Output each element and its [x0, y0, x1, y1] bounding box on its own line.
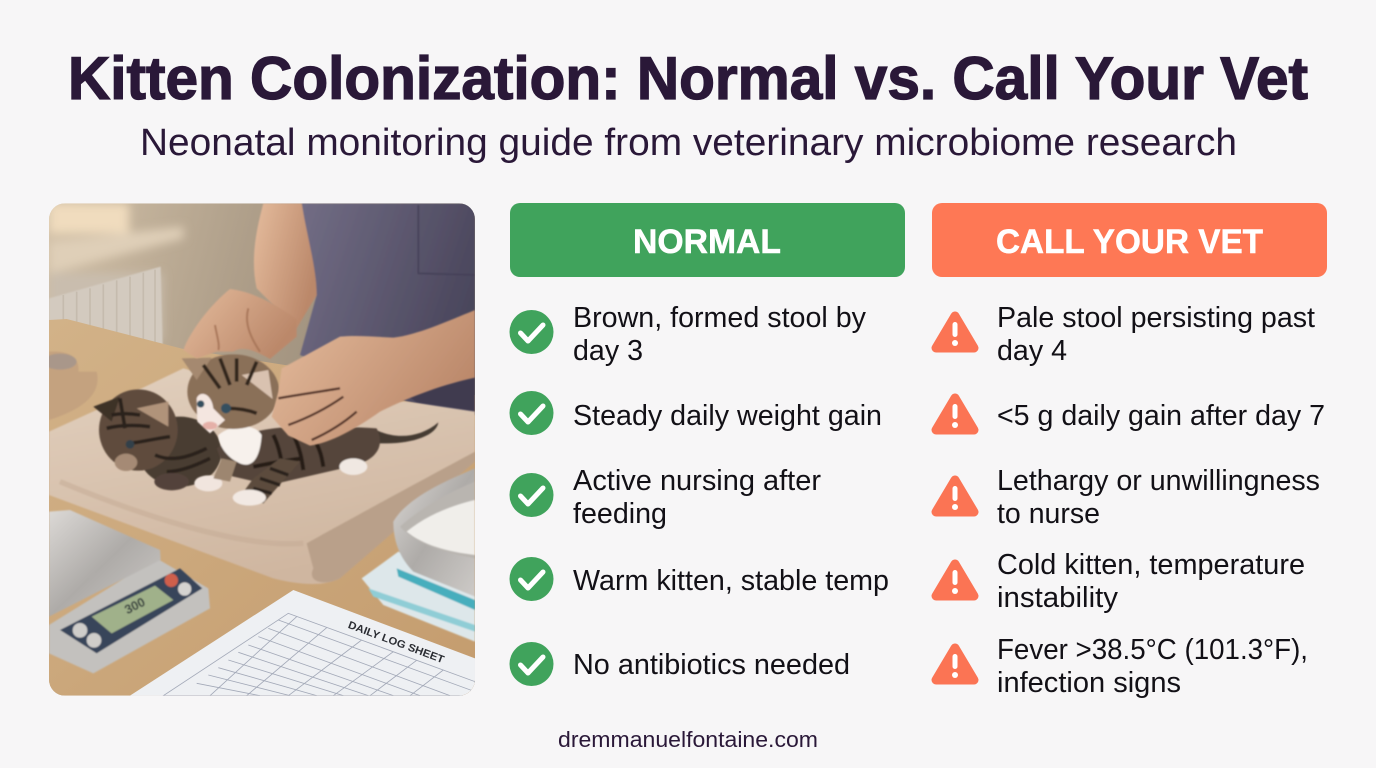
vet item: fever — [936, 634, 1308, 699]
normal item: stool: Brown, formed stool by — [573, 302, 866, 334]
normal item: antibiotics: No antibiotics needed — [573, 649, 850, 681]
normal item: weight: Steady daily weight gain — [573, 400, 882, 432]
call your vet header — [932, 203, 1327, 277]
photo: digital kitchen scale — [49, 510, 210, 673]
photo background: wall and window — [49, 203, 475, 696]
photo: daily log sheet: DAILY LOG SHEET — [346, 619, 446, 666]
vet item: cold kitten: Cold kitten, temperature — [997, 549, 1305, 581]
panel: normal — [510, 203, 905, 686]
normal item: stool: day 3 — [573, 335, 643, 367]
vet item: fever: infection signs — [997, 667, 1181, 699]
normal item: temperature — [510, 557, 889, 601]
normal item: temperature: Warm kitten, stable temp — [573, 565, 889, 597]
photo: person in scrubs — [254, 203, 475, 415]
footer website: dremmanuelfontaine.com — [558, 727, 818, 752]
vet item: cold kitten — [936, 549, 1305, 614]
normal header: NORMAL — [633, 223, 781, 261]
normal item: nursing: Active nursing after — [573, 465, 821, 497]
vet item: pale stool: Pale stool persisting past — [997, 302, 1315, 334]
vet item: pale stool — [936, 302, 1315, 367]
photo: daily log sheet — [130, 590, 475, 696]
normal item: stool — [510, 302, 866, 367]
subtitle: Neonatal monitoring guide from veterinary microbiome research — [140, 122, 1237, 164]
vet item: cold kitten: instability — [997, 582, 1118, 614]
photo: kitten left — [93, 389, 222, 490]
panel: call your vet — [932, 203, 1327, 699]
normal item: nursing: feeding — [573, 498, 667, 530]
photo: digital kitchen scale: 300 — [122, 595, 148, 617]
vet item: low gain: <5 g daily gain after day 7 — [997, 400, 1325, 432]
vet item: lethargy: Lethargy or unwillingness — [997, 465, 1320, 497]
vet item: fever: Fever >38.5°C (101.3°F), — [997, 634, 1308, 666]
photo: clay dish — [49, 352, 98, 420]
photo: metal bowl with powder on teal tray — [362, 468, 475, 642]
normal item: weight — [510, 391, 882, 435]
normal item: antibiotics — [510, 642, 850, 686]
call your vet header: CALL YOUR VET — [996, 223, 1263, 261]
title: Kitten Colonization: Normal vs. Call Your Vet — [68, 45, 1308, 112]
photo: kitten right — [182, 354, 438, 506]
vet item: lethargy — [936, 465, 1320, 530]
vet item: pale stool: day 4 — [997, 335, 1067, 367]
normal item: nursing — [510, 465, 821, 530]
photo: hands — [183, 289, 475, 446]
photo: folded towel — [49, 368, 475, 584]
photo: kittens being examined on a towel — [43, 203, 475, 696]
normal header — [510, 203, 905, 277]
vet item: lethargy: to nurse — [997, 498, 1100, 530]
photo: table — [49, 319, 475, 696]
